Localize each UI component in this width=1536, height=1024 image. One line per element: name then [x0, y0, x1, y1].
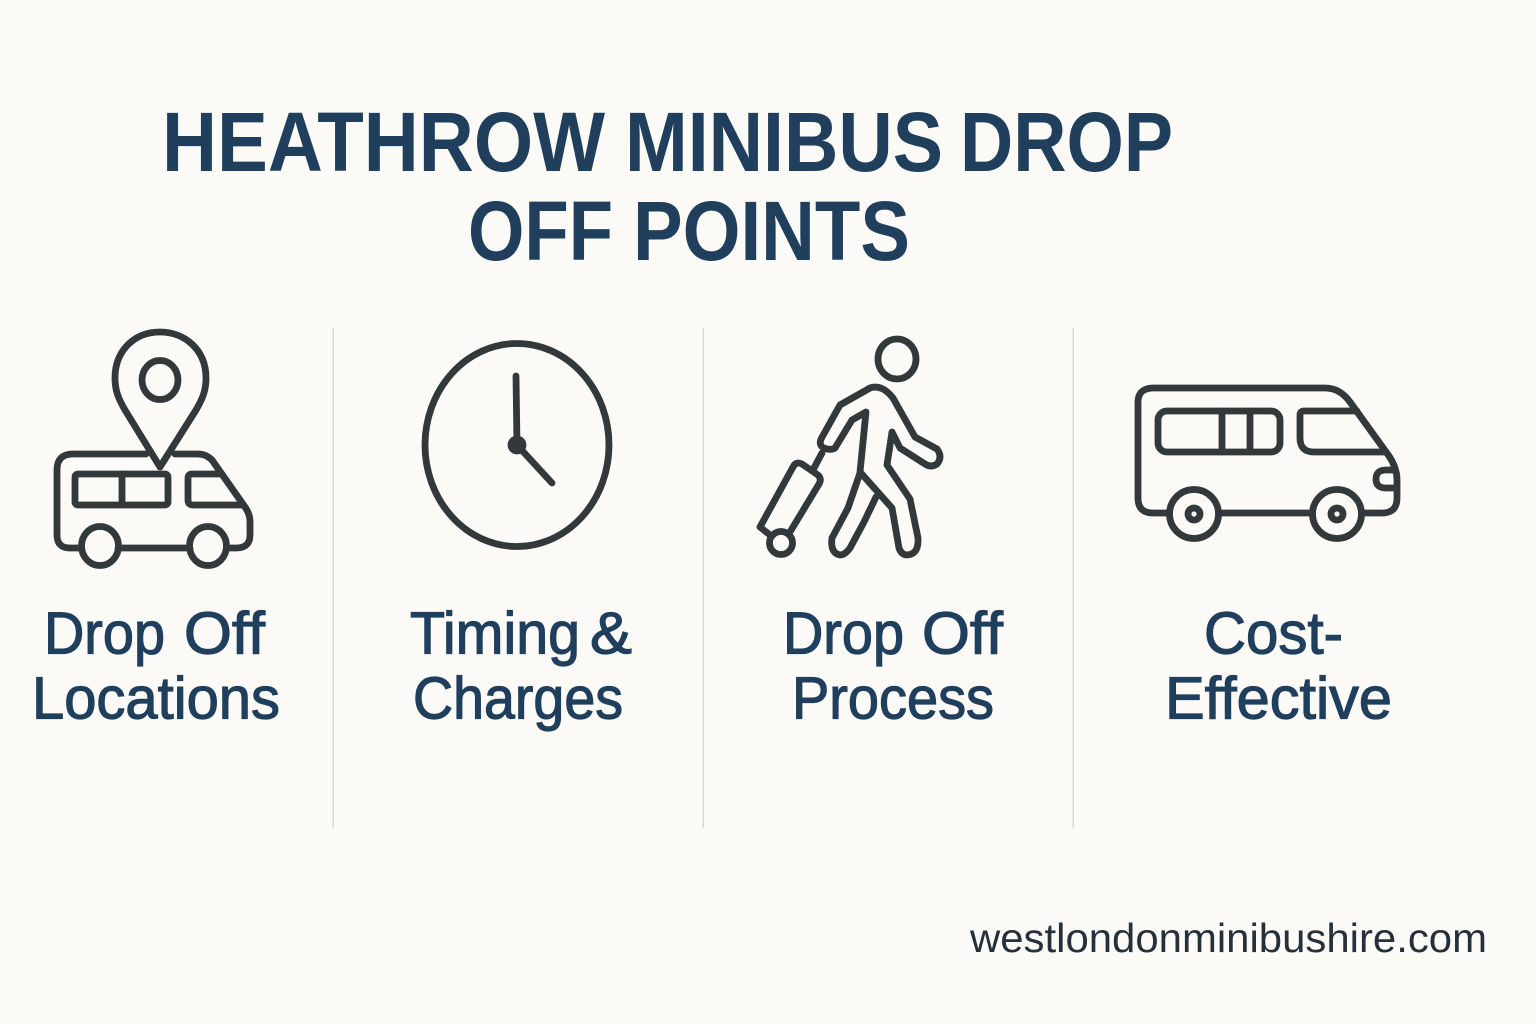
panel: timing and charges: [410, 344, 632, 732]
label: drop off process: [783, 600, 1004, 732]
label: timing and charges: [410, 600, 632, 732]
panel: drop off process: [760, 339, 1004, 732]
title: POINTS: [633, 184, 910, 278]
label: drop off process: Drop: [783, 600, 904, 666]
icon: minibus: [1138, 388, 1397, 538]
icon: clock: [425, 344, 609, 546]
title: MINIBUS: [625, 95, 943, 189]
title: DROP: [960, 95, 1173, 189]
label: timing and charges: Timing: [410, 600, 580, 666]
title: [162, 95, 1173, 278]
label: cost-effective: [1165, 600, 1392, 732]
panel: drop off locations: [32, 332, 280, 732]
label: cost-effective: Cost-: [1204, 600, 1343, 666]
title: HEATHROW: [162, 95, 606, 189]
label: drop off process: Process: [792, 666, 994, 732]
website footer: westlondonminibushire.com: [969, 915, 1487, 961]
icon: walking person with suitcase: [760, 339, 940, 555]
label: drop off locations: Locations: [32, 666, 280, 732]
label: drop off process: Off: [922, 600, 1004, 666]
title: OFF: [468, 184, 613, 278]
label: timing and charges: Charges: [413, 666, 623, 732]
icon: minibus with location pin: [57, 332, 250, 566]
label: drop off locations: Off: [184, 600, 266, 666]
label: cost-effective: Effective: [1165, 666, 1392, 732]
label: timing and charges: &: [590, 600, 632, 666]
label: drop off locations: [32, 600, 280, 732]
label: drop off locations: Drop: [44, 600, 165, 666]
panel: cost-effective: [1138, 388, 1397, 732]
